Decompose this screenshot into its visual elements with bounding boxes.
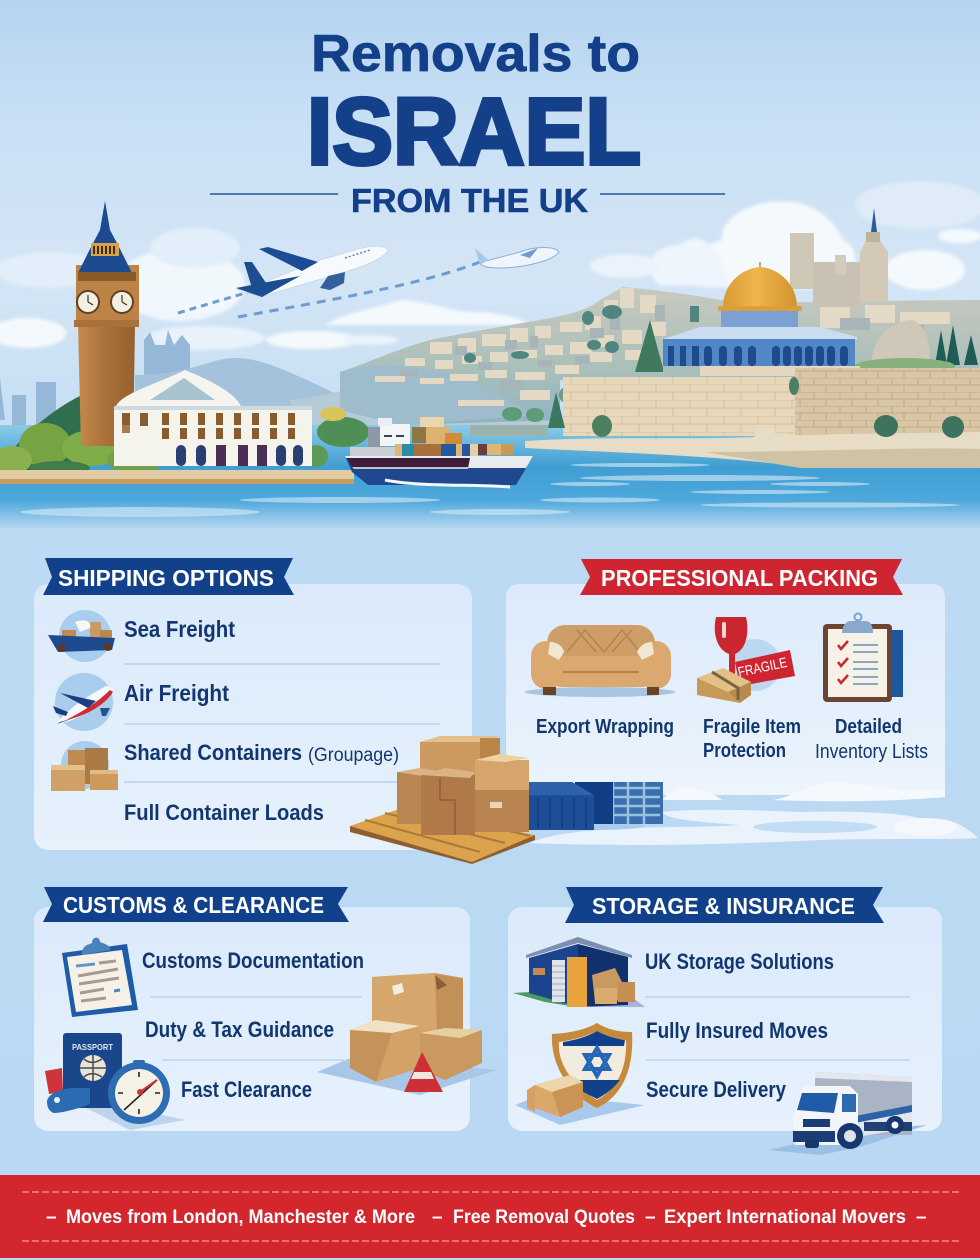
panel: professional packing: [506, 559, 978, 845]
labels: packing: Export Wrapping: [536, 716, 674, 738]
distant uk skyline: [0, 330, 350, 430]
packing banner: [580, 559, 903, 595]
icon: delivery truck: [768, 1072, 927, 1155]
labels: packing: Protection: [703, 740, 786, 762]
footer text: –: [46, 1207, 57, 1228]
clouds under packing panel: [530, 782, 978, 845]
shipping banner: [43, 558, 294, 595]
list: customs: Customs Documentation: [142, 948, 364, 973]
distant aeroplane: [475, 248, 559, 268]
icon: customs clipboard: [62, 938, 138, 1017]
labels: packing: Inventory Lists: [815, 741, 928, 763]
storage banner: STORAGE & INSURANCE: [592, 893, 855, 919]
white building: [114, 370, 312, 466]
labels: packing: Detailed: [835, 716, 902, 738]
packing banner: PROFESSIONAL PACKING: [601, 565, 878, 591]
title: israel: ISRAEL: [307, 79, 641, 185]
icon: sea freight: [48, 610, 115, 662]
customs banner: CUSTOMS & CLEARANCE: [63, 892, 324, 918]
boxes on pallet: [350, 736, 535, 864]
jerusalem hillside: [340, 287, 980, 425]
customs banner: [43, 887, 349, 922]
clouds: [0, 181, 980, 350]
labels: packing: [536, 716, 928, 763]
panel: storage and insurance: [508, 887, 942, 1155]
list: customs: Duty & Tax Guidance: [145, 1017, 334, 1042]
icon: shield with star: [515, 1023, 645, 1125]
footer text: –: [645, 1207, 656, 1228]
icon: fragile glass and box: [697, 617, 795, 703]
flight trail: [178, 262, 480, 317]
water highlights: [20, 463, 960, 517]
title block: [210, 25, 725, 219]
packing panel background: [506, 584, 945, 795]
icon: passport and stopwatch: PASSPORT: [72, 1042, 114, 1052]
customs panel background: [34, 907, 470, 1131]
large aeroplane: [236, 246, 388, 297]
list: shipping options: Shared Containers: [124, 740, 302, 765]
storage panel background: [508, 907, 942, 1131]
icon: shared container boxes: [51, 741, 118, 791]
shipping containers: [529, 782, 663, 830]
icon: customs boxes with cone: [317, 973, 497, 1095]
icon: wrapped sofa: [525, 625, 675, 697]
shipping panel background: [34, 584, 472, 850]
panel: customs and clearance: [34, 887, 497, 1131]
island with trees: [0, 395, 369, 484]
dome of the rock: [635, 262, 955, 376]
list: customs: Fast Clearance: [181, 1077, 312, 1102]
cargo ship: [345, 417, 533, 487]
list: storage: [645, 949, 834, 1102]
distant hill: [290, 365, 560, 445]
list: customs: [142, 948, 364, 1102]
footer text: Free Removal Quotes: [453, 1207, 635, 1228]
footer text: Moves from London, Manchester & More: [66, 1207, 415, 1228]
storage banner: [565, 887, 884, 923]
icon: passport and stopwatch: [45, 1033, 185, 1130]
list: shipping options: Full Container Loads: [124, 800, 324, 825]
icon: inventory clipboard: [823, 614, 903, 702]
title: from the uk: FROM THE UK: [351, 182, 588, 219]
list: storage: Fully Insured Moves: [646, 1018, 828, 1043]
footer text: –: [432, 1207, 443, 1228]
footer text: Expert International Movers: [664, 1207, 906, 1228]
old city towers: [790, 208, 978, 365]
big ben: [74, 201, 139, 446]
panel: shipping options: [34, 558, 472, 850]
fragile label text: FRAGILE: [736, 654, 789, 680]
list: shipping options: Air Freight: [124, 680, 229, 706]
title: removals to: Removals to: [311, 25, 640, 83]
icon: warehouse: [513, 937, 645, 1007]
list: shipping options: [124, 616, 399, 825]
footer text: [46, 1207, 927, 1228]
sea: [0, 425, 980, 530]
stone wall: [470, 368, 980, 468]
shipping banner: SHIPPING OPTIONS: [58, 565, 274, 591]
hero illustration: [0, 181, 980, 530]
icon: air freight: [53, 673, 113, 731]
list: shipping options: (Groupage): [308, 745, 399, 766]
labels: packing: Fragile Item: [703, 716, 801, 738]
list: shipping options: Sea Freight: [124, 616, 235, 642]
footer text: –: [916, 1207, 927, 1228]
footer band: [0, 1175, 980, 1258]
list: storage: UK Storage Solutions: [645, 949, 834, 974]
list: storage: Secure Delivery: [646, 1077, 787, 1102]
